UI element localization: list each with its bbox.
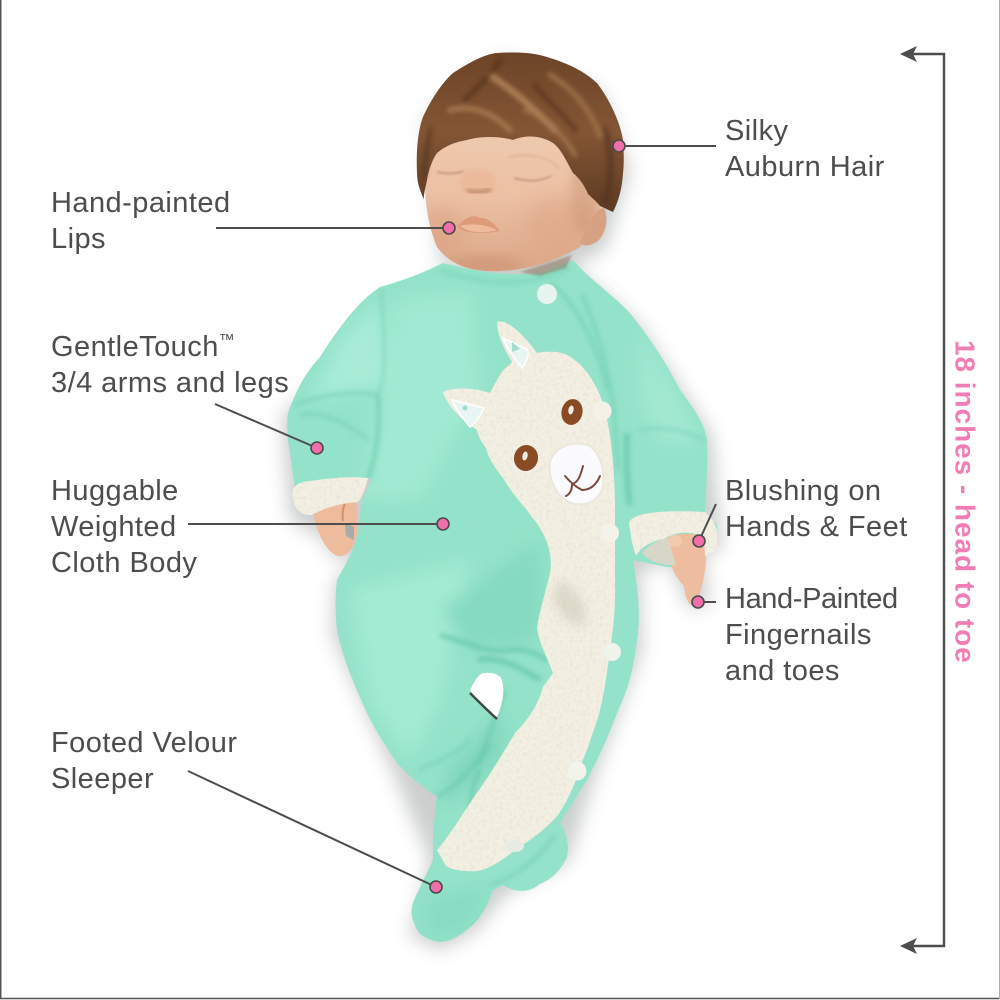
face xyxy=(425,108,606,271)
suit shading xyxy=(310,290,700,940)
left cuff xyxy=(293,477,368,515)
llama body xyxy=(437,321,615,871)
llama applique xyxy=(437,321,615,871)
label: footed velour sleeper: Sleeper xyxy=(51,763,154,795)
label: huggable weighted cloth body: Cloth Body xyxy=(51,547,197,579)
right hand xyxy=(664,534,706,606)
label: hand-painted fingernails and toes: Hand-Painted xyxy=(725,583,898,615)
label: silky auburn hair: Silky xyxy=(725,115,788,147)
drop shadow xyxy=(282,58,722,950)
right cuff inner xyxy=(642,538,676,565)
snap buttons xyxy=(506,284,621,852)
ear xyxy=(580,208,606,245)
label: hand-painted fingernails and toes: Fingernails xyxy=(725,619,872,651)
height label: 18 inches - head to toe xyxy=(950,340,980,664)
left ear inner xyxy=(452,400,484,427)
hair highlights xyxy=(424,60,610,200)
label: huggable weighted cloth body: Huggable xyxy=(51,475,179,507)
llama mouth xyxy=(565,466,600,496)
label: hand-painted lips: Lips xyxy=(51,223,106,255)
top ear inner xyxy=(503,338,528,368)
nose xyxy=(460,169,496,195)
label: hand-painted fingernails and toes: and toes xyxy=(725,655,840,687)
llama eye left xyxy=(512,443,540,473)
label: gentletouch arms and legs: GentleTouch xyxy=(51,331,219,363)
llama muzzle xyxy=(550,444,604,504)
doll illustration xyxy=(270,52,740,960)
eyes closed xyxy=(437,171,551,181)
llama fur shading xyxy=(552,580,586,626)
placket seam xyxy=(550,283,607,390)
label: gentletouch arms and legs: ™ xyxy=(219,332,235,349)
callout dots xyxy=(311,140,705,893)
llama eye right xyxy=(559,397,585,427)
crotch shadow xyxy=(470,693,497,719)
label: blushing on hands and feet: Blushing on xyxy=(725,475,882,507)
cheek blush xyxy=(428,171,600,272)
label: gentletouch arms and legs: 3/4 arms and legs xyxy=(51,367,289,399)
hair xyxy=(417,52,624,212)
label: silky auburn hair: Auburn Hair xyxy=(725,151,885,183)
crotch gap xyxy=(470,673,503,717)
left hand xyxy=(312,500,357,556)
height bracket with arrows xyxy=(900,46,944,954)
label: huggable weighted cloth body: Weighted xyxy=(51,511,177,543)
suit body xyxy=(287,260,717,942)
label: blushing on hands and feet: Hands & Feet xyxy=(725,511,908,543)
head xyxy=(417,52,624,276)
label: hand-painted lips: Hand-painted xyxy=(51,187,231,219)
mouth xyxy=(458,216,500,233)
right border xyxy=(998,0,1000,998)
callout lines xyxy=(188,146,716,887)
neck shadow xyxy=(520,255,572,276)
right cuff xyxy=(629,511,717,556)
label: footed velour sleeper: Footed Velour xyxy=(51,727,237,759)
eyebrows xyxy=(508,155,559,169)
